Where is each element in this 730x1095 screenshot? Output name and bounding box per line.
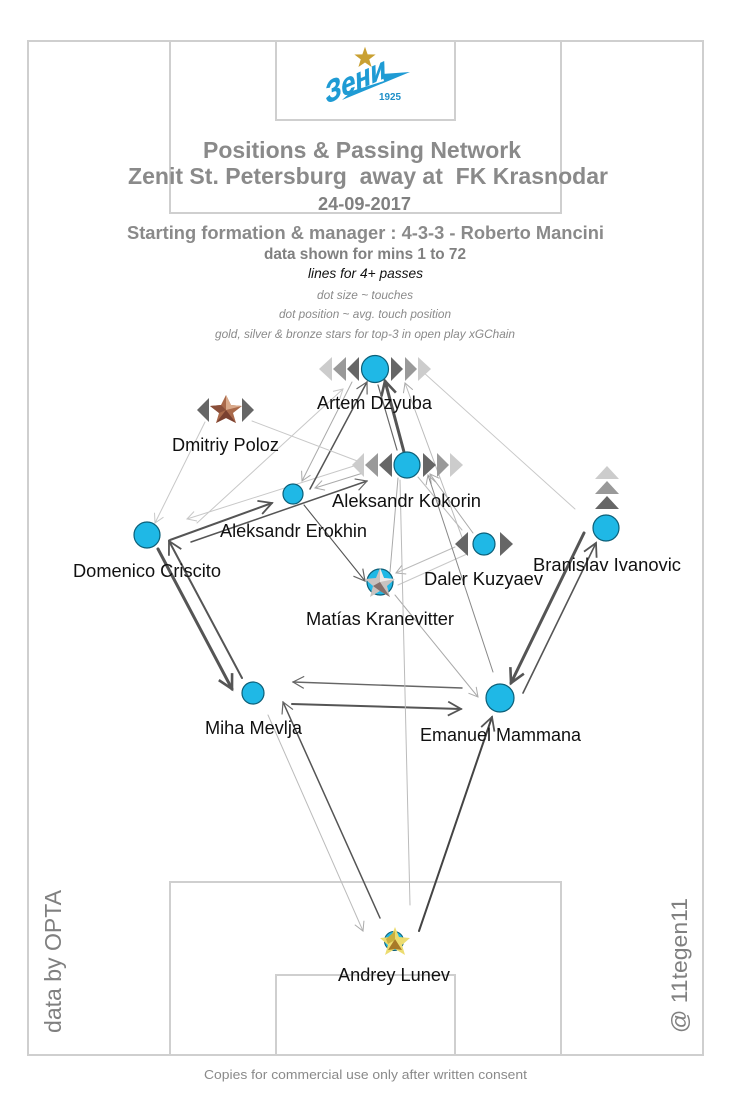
- player: Aleksandr Erokhin: Aleksandr Erokhin: [220, 521, 367, 541]
- arrow: Kokorin to Kranevitter: [390, 478, 398, 572]
- arrow: Criscito to Dzyuba: [197, 389, 343, 523]
- player: Domenico Criscito: [73, 522, 221, 581]
- player: Aleksandr Erokhin: [220, 484, 367, 541]
- arrow: Dzyuba to Erokhin: [302, 382, 352, 481]
- passing network lines: [155, 372, 596, 931]
- player: Miha Mevlja: [205, 682, 303, 738]
- copyright footer: Copies for commercial use only after written consent: [204, 1067, 527, 1082]
- player: Daler Kuzyaev: Daler Kuzyaev: [424, 569, 543, 589]
- player: Aleksandr Kokorin: [332, 452, 481, 511]
- arrow: Criscito to Erokhin: [170, 503, 272, 540]
- arrow: Erokhin to Kranevitter: [304, 505, 365, 581]
- arrow: Mevlja to Mammana: [292, 704, 461, 709]
- player: Andrey Lunev: [338, 927, 450, 985]
- arrow: Lunev to Mammana: [419, 717, 492, 931]
- player: Emanuel Mammana: Emanuel Mammana: [420, 725, 582, 745]
- player: Matías Kranevitter: Matías Kranevitter: [306, 609, 454, 629]
- player: Daler Kuzyaev: [424, 532, 543, 589]
- subtitle: match: Zenit St. Petersburg away at FK Krasnodar: [128, 163, 608, 189]
- arrow: Kokorin to Criscito: [187, 465, 357, 519]
- arrow: Kranevitter to Kuzyaev: [398, 554, 467, 585]
- icon: Zenit club logo: Зени: [325, 50, 387, 111]
- title: Positions & Passing Network: [203, 137, 521, 163]
- arrow: Mammana to Mevlja: [293, 682, 462, 688]
- formation and manager: Starting formation & manager : 4-3-3 - Roberto Mancini: [127, 222, 604, 243]
- arrow: Mevlja to Criscito: [169, 541, 242, 678]
- arrow: Criscito to Kokorin: [191, 481, 367, 542]
- arrow: Ivanovic to Mammana: [511, 533, 584, 683]
- author credit: @ 11tegen11: [667, 898, 692, 1033]
- player: Matías Kranevitter: [306, 568, 454, 629]
- player: Branislav Ivanovic: [533, 466, 681, 575]
- legend: dot size: dot size ~ touches: [317, 288, 413, 302]
- player: Artem Dzyuba: [317, 356, 433, 413]
- arrow: Poloz to Kokorin: [252, 421, 360, 462]
- legend: stars: gold, silver & bronze stars for top-3 in open play xGChain: [215, 327, 515, 341]
- player: Artem Dzyuba: Artem Dzyuba: [317, 393, 433, 413]
- player: Branislav Ivanovic: Branislav Ivanovic: [533, 555, 681, 575]
- arrow: Kuzyaev to Dzyuba: [405, 383, 463, 540]
- line threshold note: lines for 4+ passes: [308, 266, 423, 281]
- data source credit: data by OPTA: [40, 889, 66, 1033]
- match date: 24-09-2017: [318, 194, 411, 214]
- arrow: Ivanovic to Dzyuba: [423, 372, 575, 509]
- arrow: Kokorin to Dzyuba thin: [378, 385, 397, 450]
- arrow: Lunev to Mevlja: [283, 702, 380, 918]
- player: Miha Mevlja: Miha Mevlja: [205, 718, 303, 738]
- player: Dmitriy Poloz: Dmitriy Poloz: [172, 435, 279, 455]
- arrow: Kranevitter to Mammana: [395, 595, 478, 697]
- data window note: data shown for mins 1 to 72: [264, 246, 466, 263]
- arrow: Mammana to Kokorin: [428, 475, 493, 672]
- arrow: Poloz to Criscito: [155, 422, 205, 523]
- arrow: Lunev to Kokorin: [400, 480, 410, 905]
- player: Andrey Lunev: Andrey Lunev: [338, 965, 450, 985]
- arrow: Kokorin to Kuzyaev: [418, 477, 462, 530]
- arrow: Mevlja to Lunev: [268, 715, 363, 931]
- player: Emanuel Mammana: [420, 684, 582, 745]
- icon: Zenit club logo: 1925: [379, 92, 401, 103]
- legend: dot position: dot position ~ avg. touch position: [279, 307, 451, 321]
- arrow: Erokhin to Dzyuba: [310, 382, 367, 489]
- arrow: Mammana to Ivanovic: [523, 543, 596, 693]
- player: Aleksandr Kokorin: Aleksandr Kokorin: [332, 491, 481, 511]
- arrow: Kuzyaev to Kokorin: [430, 474, 473, 533]
- player: Dmitriy Poloz: [172, 395, 279, 455]
- arrow: Kokorin to Erokhin: [315, 473, 363, 488]
- player: Domenico Criscito: Domenico Criscito: [73, 561, 221, 581]
- arrow: Kuzyaev to Kranevitter: [396, 547, 455, 573]
- arrow: Criscito to Mevlja: [158, 549, 232, 689]
- arrow: Kokorin to Dzyuba: [385, 381, 404, 452]
